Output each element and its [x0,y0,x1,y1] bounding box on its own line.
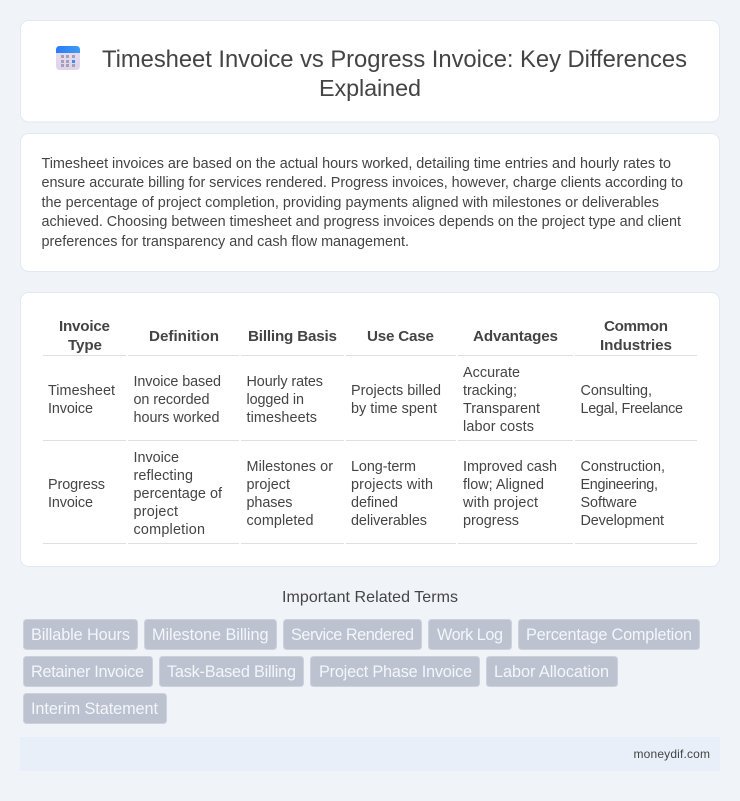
tag: Percentage Completion [518,620,700,650]
cell: common industries [580,383,683,417]
cell: use case: projects with [351,477,433,493]
cell: invoice type: Invoice [48,401,93,417]
title: Explained [319,75,421,101]
footer source text: moneydif.com [634,747,710,761]
cell: invoice type: Timesheet [48,383,115,399]
text block: introduction paragraph: achieved. Choosing between timesheet and progress invoices depends on the project type and client [42,214,681,230]
tag: Retainer Invoice [24,656,152,686]
footer bar [20,737,720,771]
cell: common industries: Development [580,513,664,529]
cell: advantages: with project [462,495,538,511]
title: Timesheet Invoice vs Progress Invoice: Key Differences [102,46,687,73]
cell: common industries: Consulting, [580,383,652,399]
cell: use case: Projects billed [351,383,441,399]
cell: advantages: tracking; [463,383,517,399]
cell: definition [134,374,221,426]
cell: invoice type [48,383,115,417]
tag: Task-Based Billing: Task-Based Billing [167,663,296,681]
tag: Milestone Billing [144,620,276,650]
cell: definition: reflecting [134,468,193,484]
cell: common industries: Legal, Freelance [580,401,683,417]
table row: Progress Invoice [48,450,665,538]
cell: definition: percentage of [134,486,223,502]
cell: advantages: labor costs [463,419,534,435]
cell: advantages: Transparent [463,401,540,417]
table header row [59,318,672,354]
header: Invoice Type [59,318,110,354]
tag: Service Rendered: Service Rendered [291,626,414,644]
tag: Project Phase Invoice: Project Phase Invoice [319,663,472,681]
cell: definition: project [134,504,178,520]
header: Common Industries [600,318,672,354]
tag: Work Log: Work Log [437,626,503,644]
cell: invoice type [48,477,105,511]
cell: billing basis: completed [246,513,314,529]
cell: advantages [462,459,557,529]
cell: definition: hours worked [134,410,220,426]
cell: invoice type: Invoice [48,495,93,511]
cell: use case: by time spent [351,401,437,417]
tag: Service Rendered [284,620,422,650]
header: Common Industries: Common [604,318,668,335]
tag: Percentage Completion: Percentage Completion [526,626,692,644]
text block: introduction paragraph [42,156,683,250]
cell: use case [351,459,433,529]
cell: billing basis: Milestones or [246,459,333,475]
tag: Milestone Billing: Milestone Billing [152,626,268,644]
cell: advantages: progress [463,513,519,529]
cell: use case: deliverables [351,513,427,529]
tag: Billable Hours: Billable Hours [31,626,130,644]
cell: common industries [580,459,665,529]
text block: introduction paragraph: the percentage of project completion, providing payments aligned with milestones or deliverables [42,195,659,211]
tag: Task-Based Billing [160,656,304,686]
title [102,46,687,101]
cell: advantages: Improved cash [463,459,557,475]
tag: Interim Statement [24,694,166,724]
tag: Billable Hours [24,620,138,650]
cell: common industries: Engineering, [580,477,658,493]
header: Invoice Type: Type [68,337,102,354]
cell: invoice type: Progress [48,477,105,493]
cell: use case: Long-term [351,459,416,475]
cell: common industries: Construction, [580,459,665,475]
panel: title header [20,20,720,122]
tag: Work Log [428,620,512,650]
cell: use case [351,383,441,417]
cell: advantages: Accurate [463,365,520,381]
header: Common Industries: Industries [600,337,672,354]
icon: calendar [56,46,80,70]
cell: billing basis [246,459,333,529]
cell: definition: on recorded [134,392,210,408]
text block: introduction paragraph: ensure accurate billing for services rendered. Progress invoices, however, charge clients according to [42,175,683,191]
header: Use Case: Use Case [367,328,434,345]
cell: advantages: flow; Aligned [463,477,544,493]
cell: definition: Invoice [134,450,179,466]
table row: Timesheet Invoice [48,365,683,435]
panel: comparison table [20,292,720,566]
panel: introduction [20,134,720,272]
cell: billing basis [246,374,323,426]
tag: Interim Statement: Interim Statement [31,700,158,718]
heading: Important Related Terms: Important Related Terms [282,589,458,606]
text block: introduction paragraph: Timesheet invoices are based on the actual hours worked, detailing time entries and hourly rates to [42,156,671,172]
cell: common industries: Software [580,495,637,511]
header: Definition: Definition [149,328,219,345]
panel: related term tags [24,620,700,724]
tag: Labor Allocation [486,656,618,686]
header: Advantages: Advantages [473,328,558,345]
header: Billing Basis: Billing Basis [248,328,337,345]
cell: billing basis: logged in [246,392,304,408]
cell: billing basis: timesheets [246,410,317,426]
cell: use case: defined [351,495,398,511]
text block: introduction paragraph: preferences for transparency and cash flow management. [42,234,409,250]
tag: Labor Allocation: Labor Allocation [494,663,609,681]
cell: advantages [463,365,540,435]
cell: definition: completion [134,522,205,538]
cell: billing basis: Hourly rates [246,374,323,390]
cell: definition: Invoice based [134,374,221,390]
cell: billing basis: phases [246,495,292,511]
cell: billing basis: project [246,477,290,493]
tag: Retainer Invoice: Retainer Invoice [31,663,144,681]
header: Invoice Type: Invoice [59,318,110,335]
cell: definition [134,450,223,538]
tag: Project Phase Invoice [310,656,480,686]
